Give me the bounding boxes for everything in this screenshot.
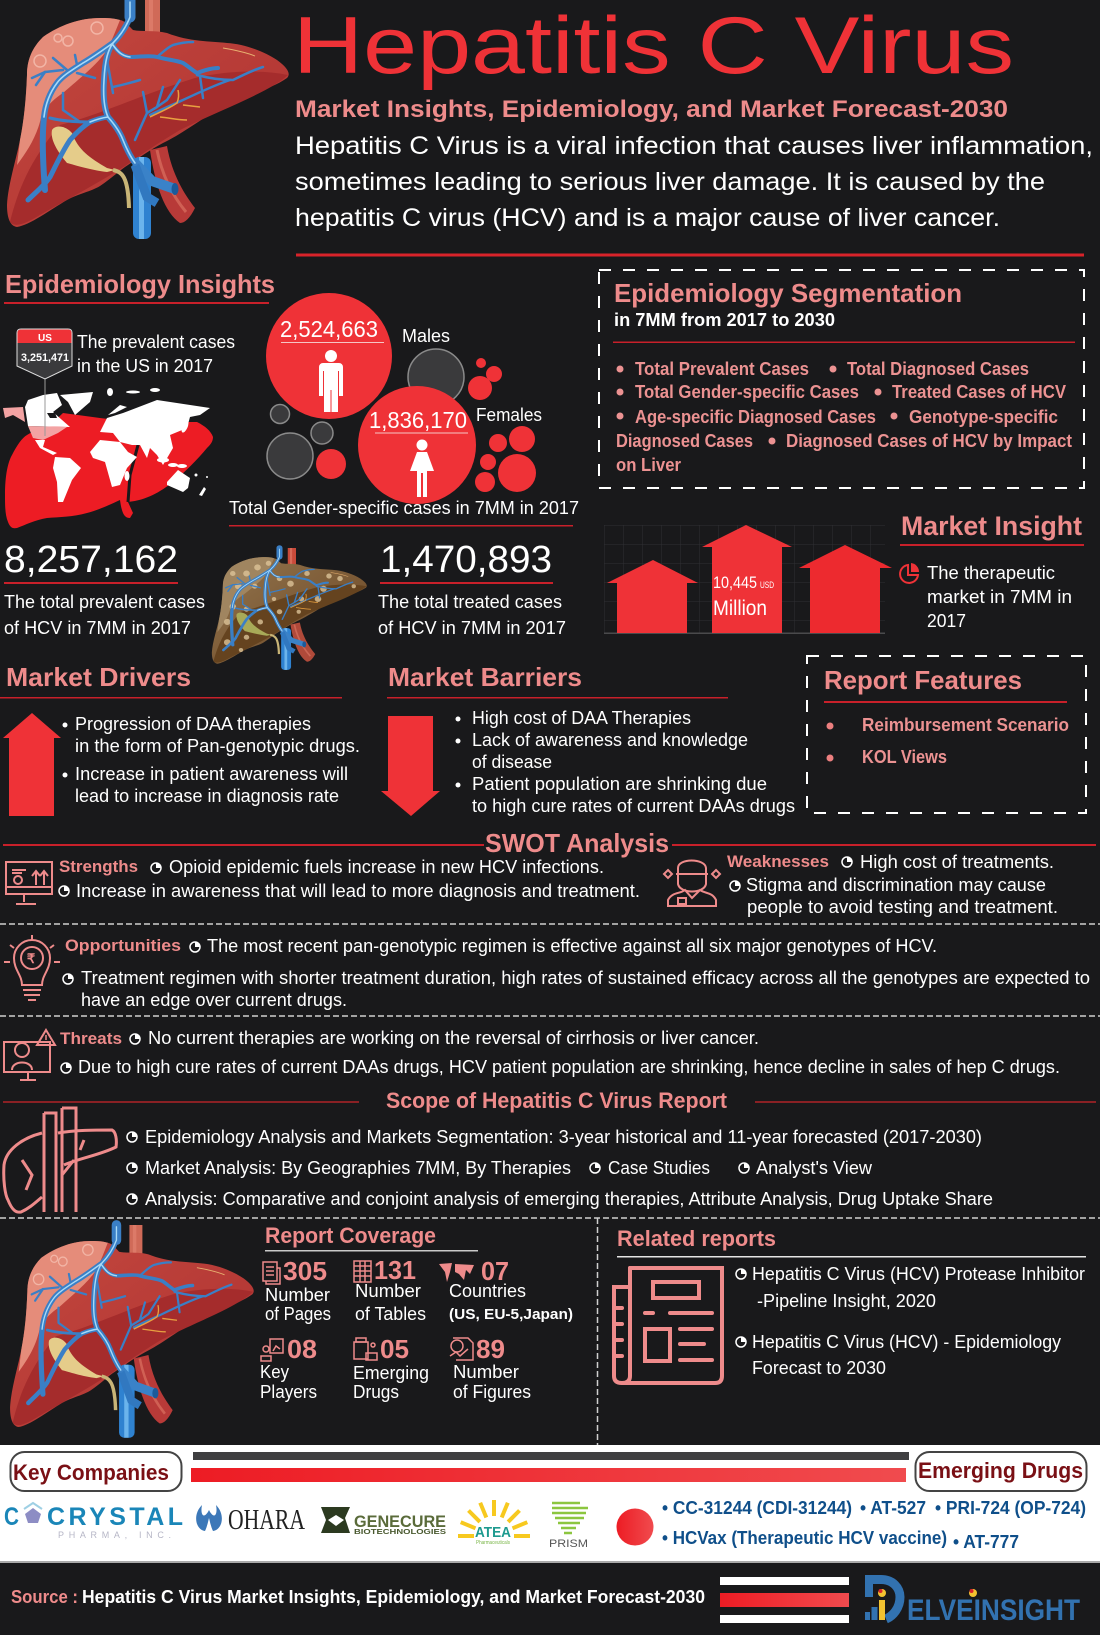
logo: DelveInsight [865, 1575, 1080, 1627]
segmentation list: on Liver [616, 455, 681, 475]
segmentation list: Treated Cases of HCV [892, 382, 1066, 402]
panel: threats: No current therapies are working on the reversal of cirrhosis or liver cancer. [148, 1028, 759, 1048]
emerging drugs list [662, 1498, 1086, 1552]
panel: market drivers: Market Drivers [6, 662, 191, 692]
panel: related reports: Hepatitis C Virus (HCV) - Epidemiology [752, 1332, 1061, 1352]
panel: market drivers: Progression of DAA therapies [75, 714, 311, 734]
panel: report coverage: Report Coverage [265, 1223, 436, 1248]
segmentation list: Genotype-specific [909, 407, 1058, 427]
panel: scope of report: Analyst's View [756, 1158, 873, 1178]
panel: strengths: Opioid epidemic fuels increase in new HCV infections. [169, 857, 604, 877]
panel: report coverage: Number [265, 1285, 330, 1305]
title: Hepatitis C Virus [293, 1, 1014, 91]
panel: report features: KOL Views [862, 747, 947, 767]
panel: weaknesses: people to avoid testing and treatment. [747, 897, 1058, 917]
panel: strengths: Strengths [59, 857, 138, 876]
panel: report coverage: Number [453, 1362, 519, 1382]
panel: epidemiology segmentation: Epidemiology Segmentation [614, 278, 962, 308]
panel: weaknesses [664, 852, 1058, 917]
panel: market barriers: to high cure rates of current DAAs drugs [472, 796, 795, 816]
panel: market drivers [0, 662, 360, 816]
panel: threats: Due to high cure rates of current DAAs drugs, HCV patient population are shrinking, hence decline in sales of hep C drugs. [78, 1057, 1060, 1077]
emerging drugs list: • AT-777 [953, 1532, 1019, 1552]
panel: report coverage: of Tables [355, 1304, 426, 1324]
stat: total prevalent: of HCV in 7MM in 2017 [4, 618, 191, 638]
logo: Cocrystal [4, 1503, 183, 1540]
world map on liver silhouette [3, 379, 213, 528]
chart: gender bubbles: Total Gender-specific cases in 7MM in 2017 [229, 498, 579, 518]
panel: report coverage: 07 [481, 1256, 509, 1286]
icon: up arrow [3, 713, 61, 816]
icon: newspaper [614, 1268, 722, 1383]
panel: threats: Threats [60, 1029, 122, 1048]
stat: total prevalent: 8,257,162 [4, 539, 178, 581]
subtitle: Market Insights, Epidemiology, and Market Forecast-2030 [295, 96, 1008, 123]
icon: red dot [616, 1508, 654, 1546]
logo: Atea [458, 1500, 530, 1546]
icon: liver outline [4, 1108, 116, 1212]
segmentation list: Diagnosed Cases of HCV by Impact [786, 431, 1072, 451]
panel: report coverage: of Figures [453, 1382, 531, 1402]
icon: figures [450, 1338, 473, 1360]
chart: market arrows: Million [713, 597, 767, 620]
liver illustration [7, 0, 289, 239]
icon: emerging drugs [354, 1338, 377, 1360]
logo: GeneCure: GENECURE [354, 1512, 446, 1531]
logo: GeneCure: BIOTECHNOLOGIES [354, 1529, 446, 1536]
segmentation list: Diagnosed Cases [616, 431, 753, 451]
stat: total treated [378, 539, 566, 638]
panel: opportunities: Opportunities [65, 936, 181, 955]
panel: report features: Reimbursement Scenario [862, 715, 1069, 735]
icon: diseased liver [212, 548, 367, 670]
icon: down arrow [381, 716, 440, 816]
footer source: Hepatitis C Virus Market Insights, Epidemiology, and Market Forecast-2030 [82, 1587, 705, 1607]
callout: US badge: US [38, 333, 52, 344]
footer bars [720, 1577, 849, 1623]
panel: market barriers: Market Barriers [388, 662, 582, 692]
text: US cases: The prevalent cases [77, 332, 235, 352]
logo: Ohara: OHARA [228, 1505, 306, 1536]
panel: weaknesses: Weaknesses [727, 852, 829, 871]
segmentation list: Total Prevalent Cases [635, 359, 809, 379]
logo: Prism: PRISM [549, 1538, 588, 1550]
panel: report coverage [260, 1223, 573, 1402]
panel: market insight: market in 7MM in [927, 587, 1072, 607]
button: emerging drugs [916, 1452, 1086, 1491]
panel: report coverage: 131 [374, 1255, 416, 1285]
chart: market arrows: 10,445 [713, 573, 757, 592]
chart: gender bubbles [229, 293, 579, 526]
heading: Epidemiology Insights [5, 269, 275, 299]
stat: total treated: of HCV in 7MM in 2017 [378, 618, 566, 638]
panel: market barriers: of disease [472, 752, 552, 772]
icon: monitor chart [6, 862, 52, 904]
panel: related reports: -Pipeline Insight, 2020 [757, 1291, 936, 1311]
panel: scope of report: Scope of Hepatitis C Virus Report [386, 1088, 728, 1113]
logo: Cocrystal: C [4, 1503, 19, 1531]
panel: epidemiology segmentation [599, 270, 1084, 488]
logo: Atea: Pharmaceuticals [476, 1540, 510, 1546]
panel: related reports: Related reports [617, 1226, 776, 1251]
emerging drugs list: • PRI-724 (OP-724) [935, 1498, 1086, 1518]
panel: opportunities: Treatment regimen with shorter treatment duration, high rates of sustained efficacy across all the genotypes are expected to [81, 968, 1090, 988]
panel: report coverage: Key [260, 1362, 289, 1382]
footer source: Source : [11, 1587, 78, 1607]
logo: DelveInsight: ELVEINSIGHT [907, 1594, 1080, 1627]
icon: pages [263, 1262, 280, 1284]
chart: gender bubbles: Males [402, 326, 450, 346]
panel: report coverage: 89 [476, 1334, 505, 1364]
icon: stressed person [664, 860, 720, 906]
panel: opportunities: have an edge over current drugs. [81, 990, 347, 1010]
panel: market insight: 2017 [927, 611, 966, 631]
panel: market barriers: Lack of awareness and knowledge [472, 730, 748, 750]
text: US cases: in the US in 2017 [77, 356, 213, 376]
panel: strengths: Increase in awareness that will lead to more diagnosis and treatment. [76, 881, 640, 901]
intro paragraph: sometimes leading to serious liver damage. It is caused by the [295, 168, 1045, 196]
panel: report coverage: Emerging [353, 1363, 429, 1383]
panel: market insight [900, 511, 1084, 631]
chart: market arrows: USD [760, 580, 774, 590]
chart: gender bubbles: Females [476, 405, 542, 425]
stat: total prevalent [4, 539, 205, 638]
panel: market drivers: in the form of Pan-genotypic drugs. [75, 736, 360, 756]
female figure [410, 440, 434, 497]
panel: opportunities: ₹ [27, 951, 36, 966]
panel: scope of report: Market Analysis: By Geographies 7MM, By Therapies [145, 1158, 571, 1178]
intro paragraph: hepatitis C virus (HCV) and is a major cause of liver cancer. [295, 204, 1000, 232]
emerging drugs list: • AT-527 [860, 1498, 926, 1518]
panel: report coverage: of Pages [265, 1304, 331, 1324]
segmentation list: Age-specific Diagnosed Cases [635, 407, 876, 427]
panel: market insight: Market Insight [901, 511, 1082, 541]
panel: market barriers: Patient population are shrinking due [472, 774, 767, 794]
icon: hacker monitor [4, 1030, 55, 1080]
text: US cases [77, 332, 235, 376]
button: key companies [10, 1452, 182, 1491]
panel: report coverage: Countries [449, 1281, 526, 1301]
panel: report coverage: Players [260, 1382, 317, 1402]
panel: scope of report: Epidemiology Analysis and Markets Segmentation: 3-year historical and 11-year forecasted (2017-2030) [145, 1127, 982, 1147]
panel: scope of report [3, 1088, 1096, 1212]
panel: report coverage: Drugs [353, 1382, 399, 1402]
stat: total treated: 1,470,893 [380, 539, 552, 581]
callout: US badge [17, 329, 72, 379]
panel: report features [807, 656, 1086, 813]
segmentation list [616, 359, 1072, 475]
panel: report coverage: (US, EU-5,Japan) [449, 1307, 573, 1323]
chart: gender bubbles: 1,836,170 [369, 407, 467, 433]
panel: report features: Report Features [824, 665, 1022, 695]
icon: table [354, 1261, 371, 1282]
intro paragraph: Hepatitis C Virus is a viral infection that causes liver inflammation, [295, 132, 1093, 160]
panel: scope of report: Case Studies [608, 1158, 710, 1178]
logo: Prism [549, 1503, 588, 1550]
panel: related reports [614, 1226, 1086, 1383]
chart: gender bubbles: 2,524,663 [280, 316, 378, 342]
panel: market drivers: lead to increase in diagnosis rate [75, 786, 339, 806]
button: key companies: Key Companies [13, 1460, 169, 1485]
stat: total prevalent: The total prevalent cases [4, 592, 205, 612]
panel: threats [4, 1028, 1060, 1080]
panel: market drivers: Increase in patient awareness will [75, 764, 348, 784]
panel: companies and drugs band [0, 1445, 1100, 1563]
emerging drugs list: • HCVax (Therapeutic HCV vaccine) [662, 1528, 947, 1548]
panel: weaknesses: Stigma and discrimination may cause [746, 875, 1046, 895]
icon: world map [439, 1263, 474, 1282]
logo: Atea: ATEA [475, 1524, 511, 1541]
panel: report coverage: 05 [380, 1334, 409, 1364]
panel: related reports: Forecast to 2030 [752, 1358, 886, 1378]
panel: strengths [6, 857, 640, 904]
segmentation list: Total Diagnosed Cases [847, 359, 1029, 379]
panel: report coverage: 08 [287, 1334, 317, 1364]
panel: weaknesses: High cost of treatments. [860, 852, 1054, 872]
panel: report coverage: Number [355, 1281, 421, 1301]
panel: opportunities [4, 935, 1090, 1010]
panel: report coverage: 305 [283, 1256, 327, 1286]
icon: key players [261, 1339, 283, 1361]
panel: market insight: The therapeutic [927, 563, 1055, 583]
logo: Cocrystal: CRYSTAL [47, 1503, 183, 1531]
heading: SWOT analysis: SWOT Analysis [485, 828, 669, 858]
emerging drugs list: • CC-31244 (CDI-31244) [662, 1498, 852, 1518]
logo: Ohara [196, 1505, 306, 1536]
panel: market barriers: High cost of DAA Therapies [472, 708, 691, 728]
chart: market arrows [604, 525, 892, 634]
panel: market barriers [381, 662, 795, 816]
panel: epidemiology insights [3, 269, 579, 670]
button: emerging drugs: Emerging Drugs [918, 1458, 1083, 1483]
panel: epidemiology segmentation: in 7MM from 2017 to 2030 [614, 310, 835, 330]
icon: pie [900, 563, 919, 583]
segmentation list: Total Gender-specific Cases [635, 382, 859, 402]
panel: related reports: Hepatitis C Virus (HCV) Protease Inhibitor [752, 1264, 1085, 1284]
logo: GeneCure [321, 1507, 446, 1536]
icon: light bulb [4, 935, 60, 1000]
callout: US badge: 3,251,471 [21, 352, 69, 364]
intro paragraph [295, 132, 1093, 232]
stat: total treated: The total treated cases [378, 592, 562, 612]
panel: opportunities: The most recent pan-genotypic regimen is effective against all six major genotypes of HCV. [207, 936, 937, 956]
panel: scope of report: Analysis: Comparative and conjoint analysis of emerging therapies, Attribute Analysis, Drug Uptake Share [145, 1189, 993, 1209]
liver illustration bottom [10, 1225, 254, 1438]
logo: Cocrystal: PHARMA, INC. [58, 1530, 171, 1540]
male figure [319, 350, 343, 412]
